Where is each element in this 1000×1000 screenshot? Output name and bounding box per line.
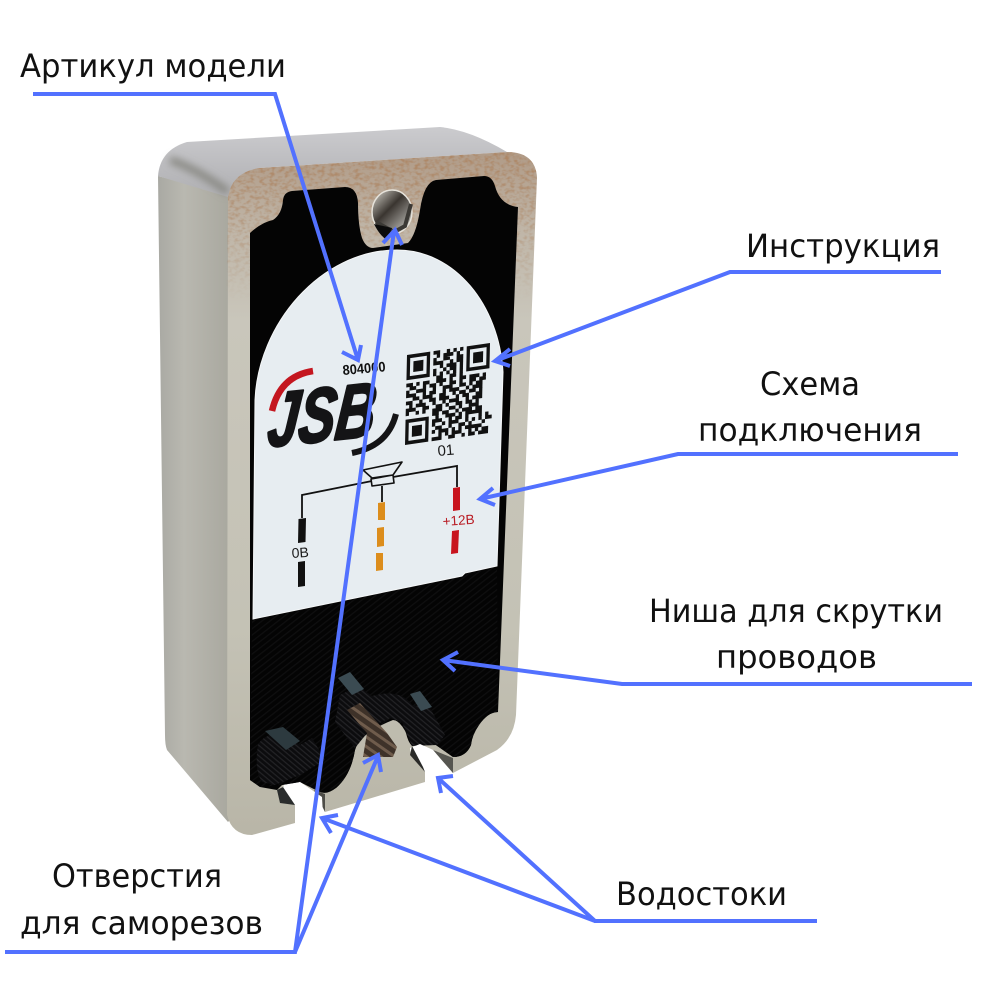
top face of the enclosure [158,127,507,197]
+12B label: +12В [442,512,475,529]
left foot dark detail [277,787,295,805]
callout: wiring diagram [480,365,958,505]
worn copper texture [227,152,537,284]
logo: swoosh [352,414,396,453]
leader arrow [33,94,361,360]
leader arrow [443,652,972,684]
front of the right foot [433,750,453,773]
callout: screw holes [5,230,402,952]
black plastic cavity [250,176,518,793]
callout: instructions [495,227,941,366]
wiring diagram [291,462,475,587]
red wire [451,487,460,554]
orange wire [376,502,385,571]
label line two: для саморезов [20,904,263,942]
logo: red arc [272,371,313,411]
callout: model number [20,47,361,360]
wire clip left [257,734,325,785]
model number: 804000 [342,358,386,378]
label: Отверстия [52,857,222,895]
label: Ниша для скрутки [649,592,943,630]
device: metal enclosure photo [158,127,538,835]
wire clip centre and right [335,686,445,748]
0B label: 0В [291,544,309,561]
leader arrows [322,776,817,921]
right foot white notch [410,744,453,783]
speaker symbol [363,462,402,486]
label: Артикул модели [20,47,286,85]
centre foot dark detail [410,746,425,772]
white label plate [253,250,503,619]
label line two: подключения [698,411,922,449]
logo: JSB wordmark: JSB [264,366,381,464]
label: Инструкция [746,227,940,265]
black wire [298,518,306,587]
QR code [405,344,493,443]
leader arrow [495,272,941,366]
printed plastic texture [250,566,498,792]
callout: drains [322,776,817,921]
leader arrows [5,230,402,952]
QR caption: 01 [437,442,455,460]
wires [302,466,457,518]
clip pin left [265,727,300,750]
soft shaded corner band [170,160,228,192]
clip pin right [410,691,432,711]
label: Водостоки [616,875,787,913]
left foot white notch [282,782,323,823]
label line two: проводов [716,638,877,676]
threaded hole lower [347,703,397,757]
leader arrow [480,454,958,505]
front metal frame [227,152,537,835]
clip pin centre [338,672,364,695]
label: Схема [760,365,860,403]
left face of the enclosure [158,176,230,822]
side of the centre foot [314,790,325,812]
callout: wire niche [443,592,972,684]
threaded hole upper lug [372,190,412,240]
